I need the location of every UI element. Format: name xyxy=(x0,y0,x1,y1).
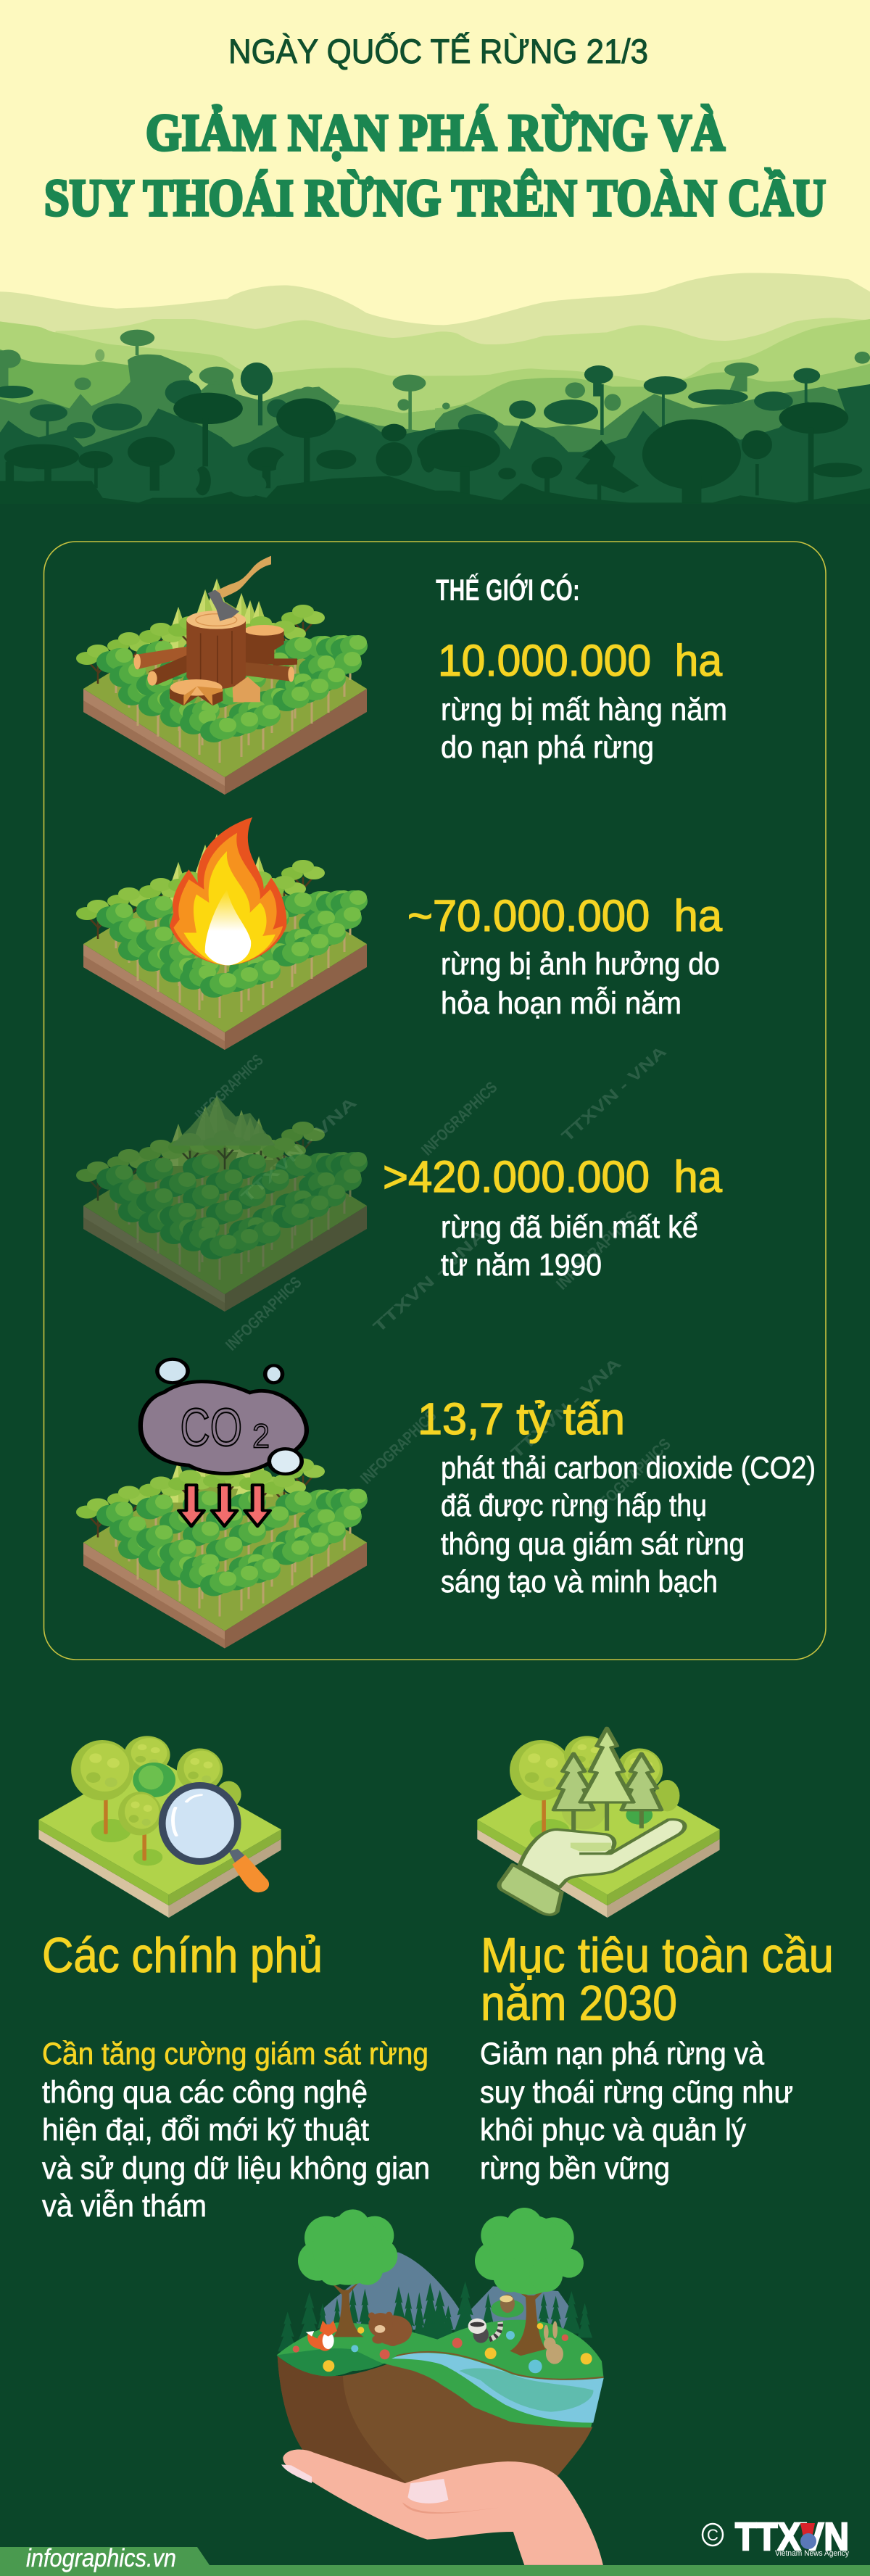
CO2 cloud: 2 xyxy=(252,1418,270,1455)
illustration: hand holding a forest ecosystem xyxy=(277,2208,604,2565)
stat description 3 xyxy=(441,1210,698,1283)
tree trunks xyxy=(331,2281,549,2356)
icon: magnifier over forest tile xyxy=(38,1736,281,1918)
main title: GIẢM NẠN PHÁ RỪNG VÀ xyxy=(146,104,725,162)
forest silhouette, left half xyxy=(0,319,438,508)
ecosystem scene xyxy=(277,2208,604,2427)
stat description 1: do nạn phá rừng xyxy=(441,730,654,765)
heading: global goal 2030: Mục tiêu toàn cầu xyxy=(481,1928,834,1983)
watermarks: INFOGRAPHICS xyxy=(552,1207,641,1293)
stat description 1 xyxy=(441,692,727,765)
body: global goal: rừng bền vững xyxy=(480,2151,670,2186)
panel: world statistics xyxy=(44,542,826,1660)
subtitle: NGÀY QUỐC TẾ RỪNG 21/3 xyxy=(228,32,648,70)
icon: vanished forest, dark tile xyxy=(76,1096,368,1312)
icon: CO2 cloud over forest tile xyxy=(76,1359,368,1649)
tree crowns xyxy=(298,2208,584,2295)
flowers xyxy=(293,2323,592,2373)
watermarks: TTXVN - VNA xyxy=(508,1354,624,1462)
landscape: layered hills xyxy=(0,273,870,506)
stat description 2: rừng bị ảnh hưởng do xyxy=(441,947,720,982)
stat: 10,000,000 ha: 10.000.000 ha xyxy=(438,636,722,685)
logo: TTXVN: Vietnam News Agency xyxy=(775,2549,849,2558)
stat: 13.7 billion tonnes: 13,7 tỷ tấn xyxy=(418,1394,625,1444)
watermarks: INFOGRAPHICS xyxy=(418,1078,501,1159)
grassy hills xyxy=(277,2320,604,2427)
stat description 1: rừng bị mất hàng năm xyxy=(441,692,727,727)
stat description 3: từ năm 1990 xyxy=(441,1248,602,1283)
stat description 3: rừng đã biến mất kể xyxy=(441,1210,698,1245)
watermarks: INFOGRAPHICS xyxy=(222,1273,305,1354)
hand xyxy=(281,2450,603,2565)
footer bar xyxy=(0,2544,870,2576)
body: global goal: suy thoái rừng cũng như xyxy=(480,2075,793,2110)
body: governments: Cần tăng cường giám sát rừng xyxy=(42,2037,428,2071)
watermarks: INFOGRAPHICS xyxy=(191,1051,267,1125)
body: governments xyxy=(42,2037,430,2224)
stat description 4: đã được rừng hấp thụ xyxy=(441,1488,707,1523)
logo: TTXVN: C xyxy=(707,2526,718,2544)
watermarks: INFOGRAPHICS xyxy=(586,1435,674,1521)
icon: hand holding pines over forest tile xyxy=(477,1728,720,1918)
footer bar: infographics.vn xyxy=(26,2544,176,2572)
body: governments: thông qua các công nghệ xyxy=(42,2075,368,2110)
stat description 2: hỏa hoạn mỗi năm xyxy=(441,986,682,1021)
header sky xyxy=(0,0,870,508)
CO2 cloud xyxy=(141,1382,307,1473)
body: global goal xyxy=(480,2037,793,2186)
raccoon xyxy=(468,2319,500,2343)
stat description 2 xyxy=(441,947,720,1021)
heading: the world has: THẾ GIỚI CÓ: xyxy=(436,572,580,607)
watermarks: TTXVN - VNA xyxy=(370,1225,489,1336)
stat: 70,000,000 ha: ~70.000.000 ha xyxy=(407,891,722,940)
icon: forest fire on tile xyxy=(76,817,368,1050)
soil globe xyxy=(278,2356,592,2486)
heading: global goal 2030: năm 2030 xyxy=(481,1976,677,2031)
river xyxy=(392,2353,604,2423)
main title xyxy=(44,104,826,227)
heading: global goal 2030 xyxy=(481,1928,834,2031)
heading: governments: Các chính phủ xyxy=(42,1928,323,1983)
forest silhouette, right half xyxy=(417,318,870,508)
watermarks: TTXVN - VNA xyxy=(558,1042,670,1146)
stat description 4 xyxy=(441,1451,816,1599)
rabbit xyxy=(544,2321,563,2364)
watermarks: INFOGRAPHICS xyxy=(357,1407,440,1488)
icon: deforestation, stump and axe on forest tile xyxy=(76,556,368,795)
body: global goal: khôi phục và quản lý xyxy=(480,2113,746,2148)
pine forest xyxy=(278,2282,592,2351)
fox xyxy=(306,2321,337,2351)
CO2 cloud: CO xyxy=(181,1397,242,1457)
logo: TTXVN: TTXVN xyxy=(735,2515,849,2559)
body: governments: hiện đại, đổi mới kỹ thuật xyxy=(42,2113,369,2148)
body: global goal: Giảm nạn phá rừng và xyxy=(480,2037,764,2071)
stat description 4: phát thải carbon dioxide (CO2) xyxy=(441,1451,816,1486)
bear xyxy=(368,2312,412,2346)
mountains xyxy=(324,2253,575,2329)
watermarks xyxy=(191,1042,674,1521)
stat description 4: thông qua giám sát rừng xyxy=(441,1527,745,1562)
arrows pointing down xyxy=(178,1485,270,1526)
stat: 420,000,000 ha: >420.000.000 ha xyxy=(383,1152,722,1201)
dark forest floor xyxy=(0,504,870,555)
owl xyxy=(491,2295,524,2318)
body: governments: và sử dụng dữ liệu không gian xyxy=(42,2151,430,2186)
watermarks: TTXVN - VNA xyxy=(238,1093,360,1206)
body: governments: và viễn thám xyxy=(42,2189,207,2224)
stat description 4: sáng tạo và minh bạch xyxy=(441,1565,718,1599)
